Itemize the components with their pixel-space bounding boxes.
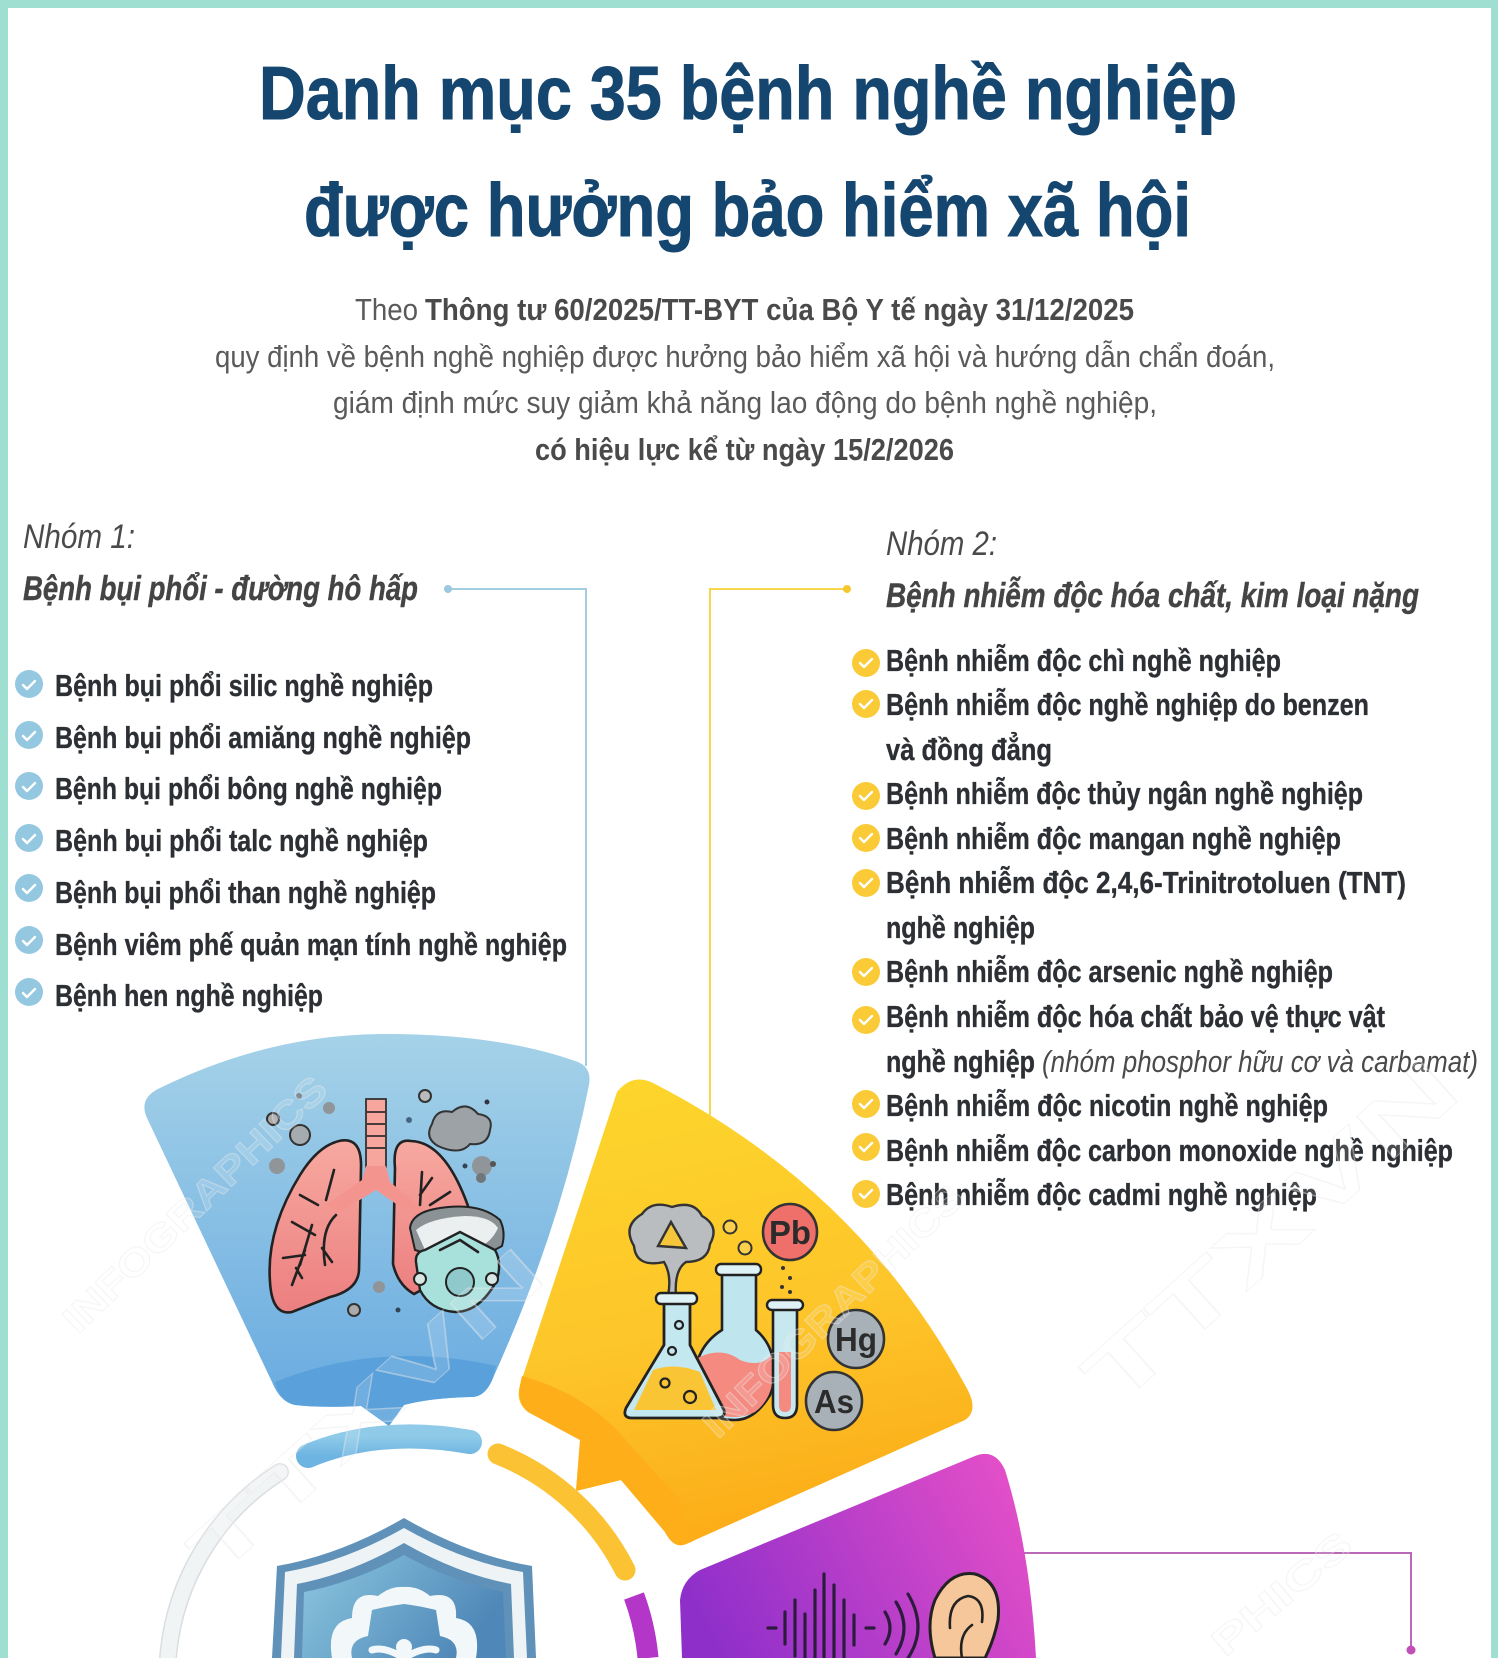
icon: droplets [780, 1266, 792, 1294]
subtitle text block [215, 292, 1275, 467]
item: TNT [852, 865, 1406, 945]
item: TNT: nghề nghiệp [886, 910, 1035, 945]
icon: conical flask [625, 1293, 724, 1418]
group 1 heading: Bệnh bụi phổi - đường hô hấp [23, 570, 418, 608]
icon: ear [930, 1574, 999, 1658]
group 1 disease list [15, 668, 567, 1013]
watermarks: INFOGRAPHICS [55, 1068, 336, 1341]
icon: As badge: As [814, 1383, 854, 1420]
item: viêm phế quản: Bệnh viêm phế quản mạn tính nghề nghiệp [55, 927, 567, 962]
watermarks: INFOGRAPHICS [695, 1177, 972, 1446]
item: amiăng: Bệnh bụi phổi amiăng nghề nghiệp [55, 720, 471, 755]
panel band [520, 1376, 690, 1545]
group 1 heading: Nhóm 1: [23, 518, 135, 556]
icon: bubbles [724, 1220, 752, 1254]
icon: lungs with mask [270, 1099, 504, 1312]
subtitle text block: Theo [355, 292, 418, 327]
item: hóa chất bảo vệ thực vật: nghề nghiệp [886, 1044, 1035, 1079]
icon: toxic cloud [630, 1205, 714, 1296]
item: silic: Bệnh bụi phổi silic nghề nghiệp [55, 668, 433, 703]
icon: test tube [767, 1300, 803, 1418]
icon: Hg badge: Hg [835, 1321, 877, 1358]
title: được hưởng bảo hiểm xã hội [304, 168, 1191, 252]
icon: sound wave [768, 1574, 918, 1658]
icon: Hg badge [828, 1310, 884, 1368]
item: thủy ngân: Bệnh nhiễm độc thủy ngân nghề nghiệp [886, 776, 1363, 811]
icon: round flask [694, 1264, 774, 1420]
arc: purple segment [634, 1596, 648, 1658]
item: hóa chất bảo vệ thực vật: Bệnh nhiễm độc hóa chất bảo vệ thực vật [886, 999, 1385, 1034]
icon: dust particles [267, 1090, 496, 1316]
item: than: Bệnh bụi phổi than nghề nghiệp [55, 875, 436, 910]
item: TNT: Bệnh nhiễm độc 2,4,6-Trinitrotoluen (TNT) [886, 865, 1406, 900]
watermarks: TTXVN [173, 1232, 559, 1591]
item: mangan: Bệnh nhiễm độc mangan nghề nghiệp [886, 821, 1341, 856]
group 1 heading [23, 518, 418, 608]
item: benzen: Bệnh nhiễm độc nghề nghiệp do benzen [886, 687, 1369, 722]
panel band [275, 1356, 496, 1426]
item: hóa chất bảo vệ thực vật [852, 999, 1478, 1079]
subtitle text block: quy định về bệnh nghề nghiệp được hưởng bảo hiểm xã hội và hướng dẫn chẩn đoán, [215, 339, 1275, 374]
connector: group 3 [1020, 1553, 1416, 1654]
arc: grey segment [168, 1472, 280, 1658]
panel: purple noise [680, 1454, 1036, 1658]
arc: blue segment [308, 1436, 470, 1456]
subtitle text block: có hiệu lực kể từ ngày 15/2/2026 [535, 432, 954, 467]
item: nicotin: Bệnh nhiễm độc nicotin nghề nghiệp [886, 1088, 1328, 1123]
group 2 heading: Nhóm 2: [886, 525, 997, 563]
icon: shield [272, 1518, 536, 1658]
watermarks [55, 1041, 1476, 1658]
icon: Pb badge: Pb [769, 1214, 811, 1251]
item: chì: Bệnh nhiễm độc chì nghề nghiệp [886, 643, 1281, 678]
title: Danh mục 35 bệnh nghề nghiệp [259, 51, 1237, 135]
panel: blue lungs [144, 1034, 590, 1426]
connector: group 2 [710, 585, 851, 1115]
group 2 heading [886, 525, 1419, 615]
panel: yellow chemicals [519, 1080, 972, 1545]
item: cadmi: Bệnh nhiễm độc cadmi nghề nghiệp [886, 1177, 1317, 1212]
item: arsenic: Bệnh nhiễm độc arsenic nghề nghiệp [886, 954, 1333, 989]
icon: As badge [806, 1372, 862, 1430]
item: benzen: và đồng đẳng [886, 731, 1052, 767]
item: hen: Bệnh hen nghề nghiệp [55, 978, 323, 1013]
title [259, 51, 1237, 252]
icon: Pb badge [763, 1204, 817, 1260]
connector: group 1 [444, 585, 586, 1066]
item: benzen [852, 687, 1369, 767]
item: bông: Bệnh bụi phổi bông nghề nghiệp [55, 771, 442, 806]
item: talc: Bệnh bụi phổi talc nghề nghiệp [55, 823, 428, 858]
watermarks: TTXVN [1066, 1041, 1476, 1423]
subtitle text block: giám định mức suy giảm khả năng lao động do bệnh nghề nghiệp, [333, 385, 1157, 420]
subtitle text block: Thông tư 60/2025/TT-BYT của Bộ Y tế ngày 31/12/2025 [425, 292, 1134, 327]
arc: yellow segment [498, 1454, 625, 1570]
list: group 2 disease list [852, 643, 1478, 1212]
